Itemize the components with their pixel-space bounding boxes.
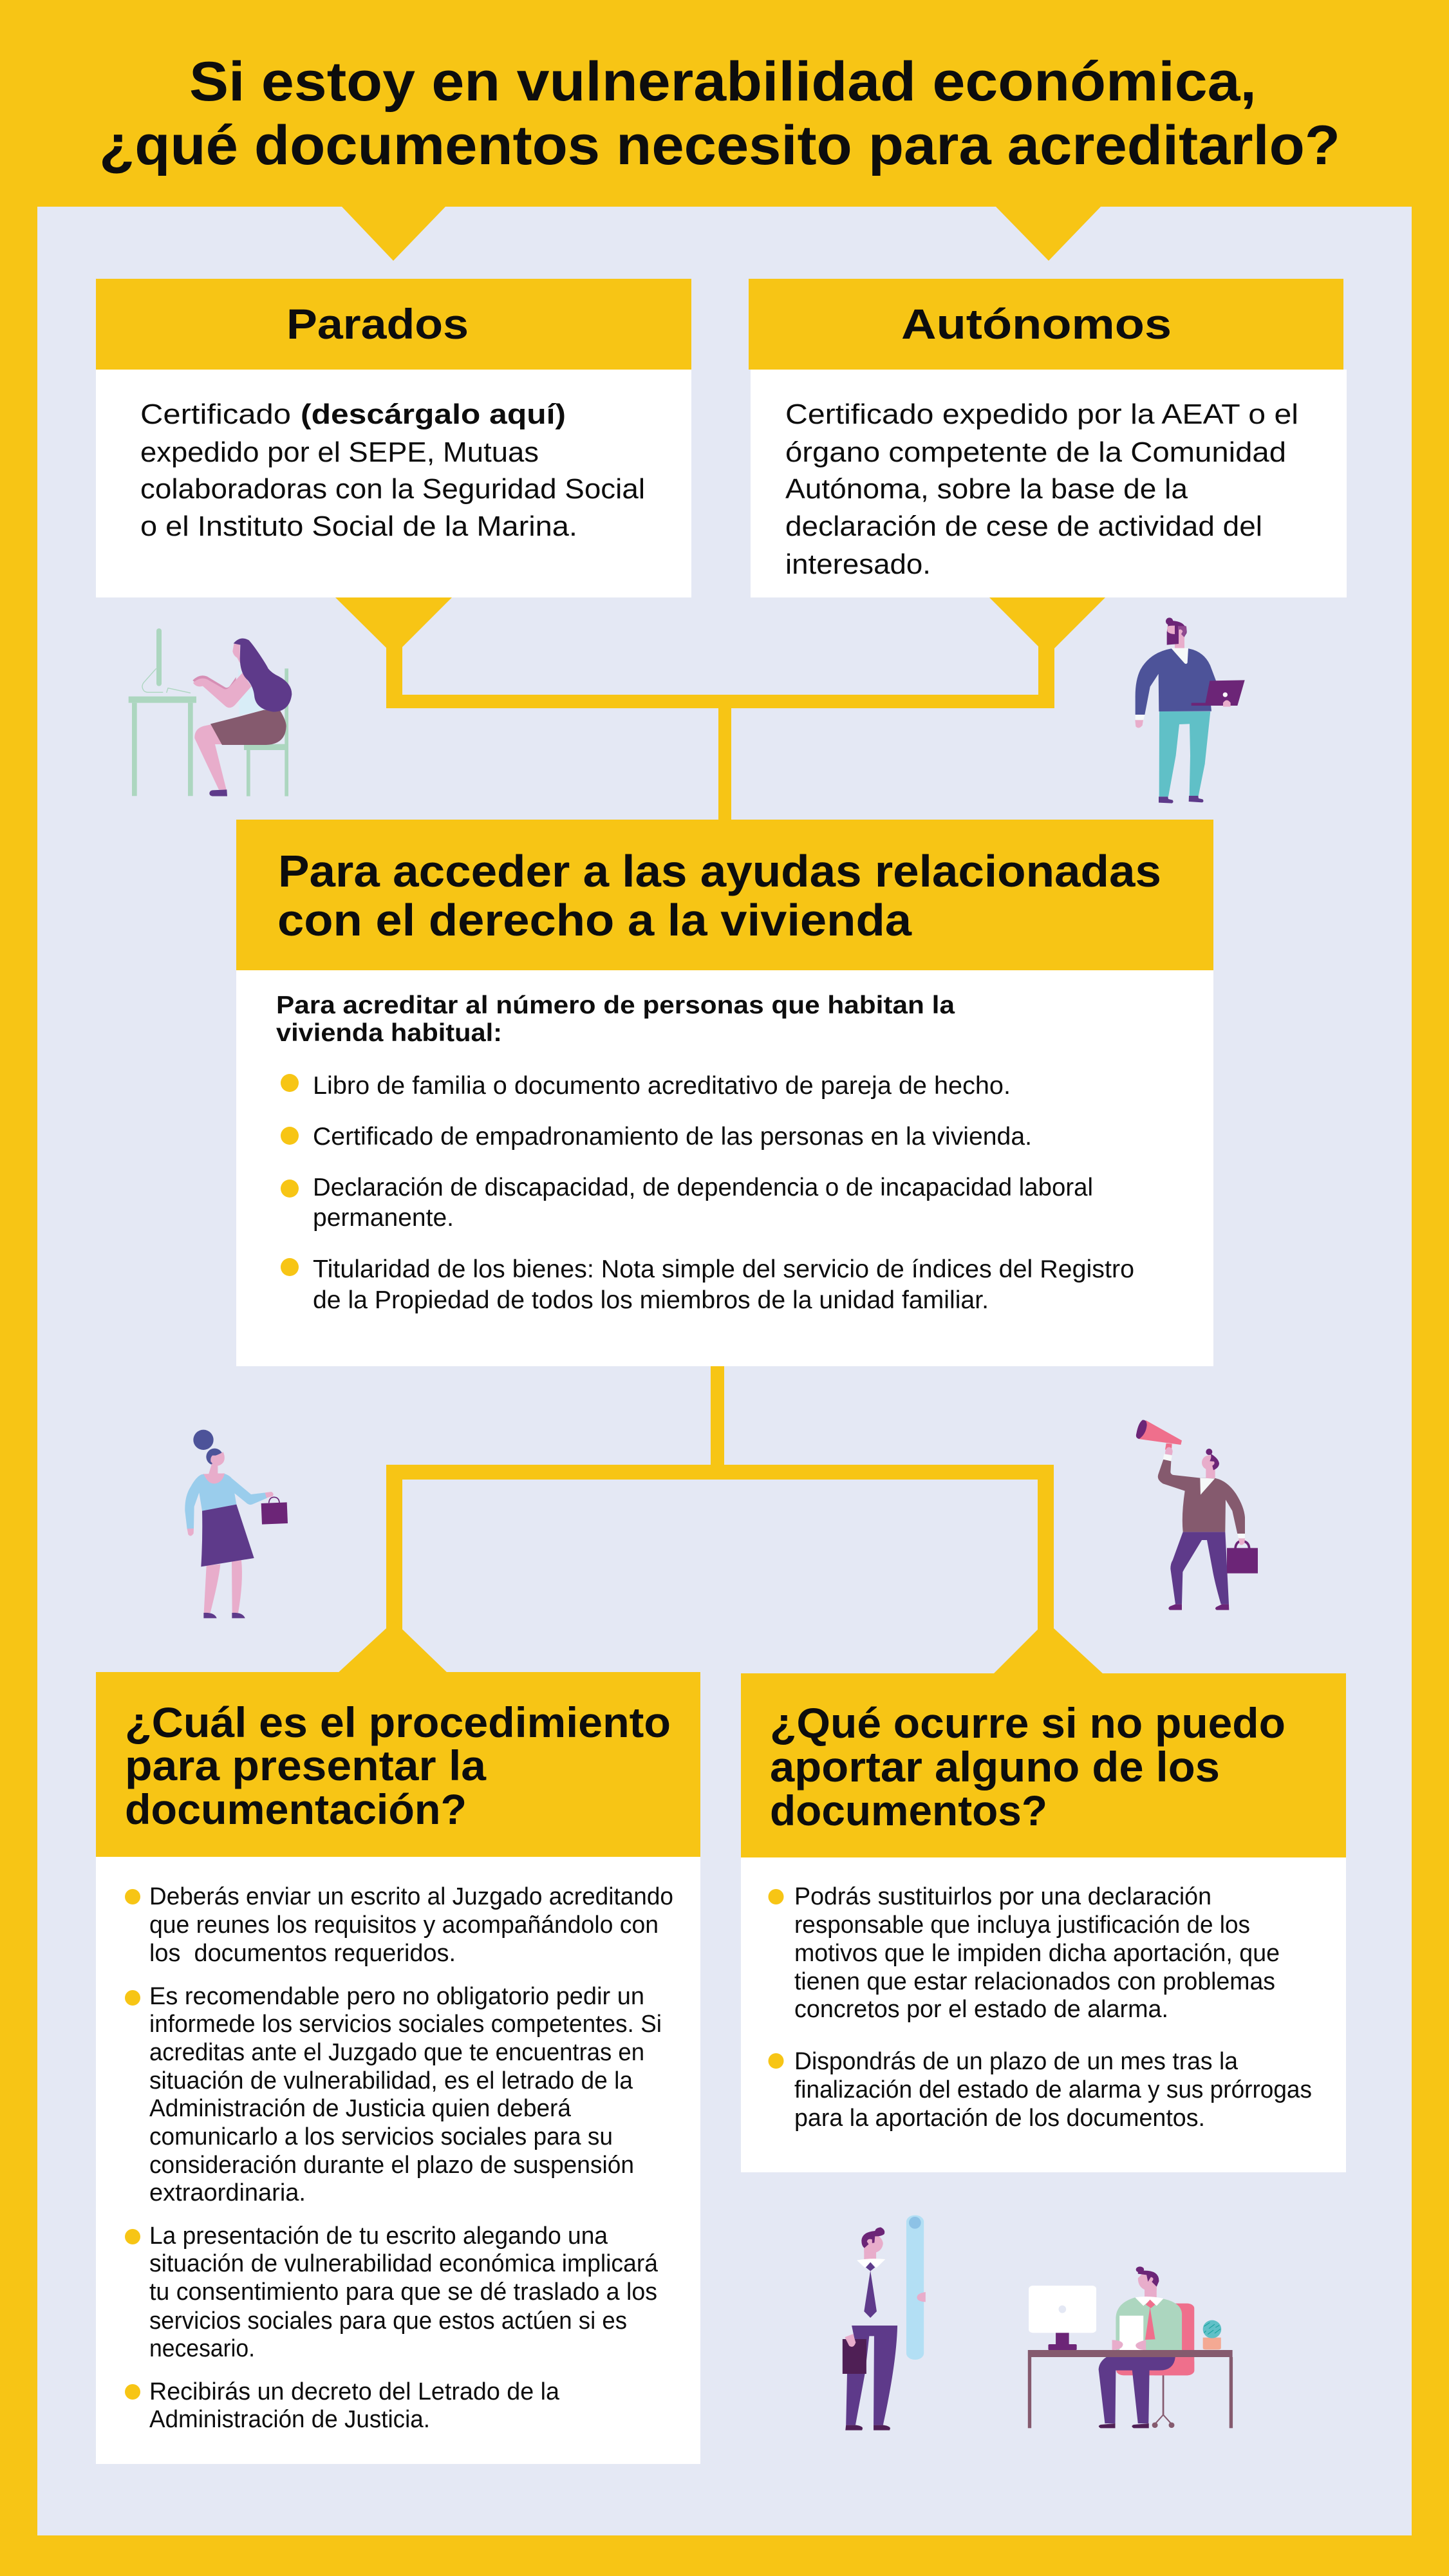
icon: man with megaphone and briefcase xyxy=(1136,1420,1258,1610)
Autónomos body text: declaración de cese de actividad del xyxy=(785,511,1262,542)
icon: woman with handbag xyxy=(185,1430,288,1618)
panel: Parados xyxy=(96,279,691,597)
procedure bullet list: La presentación de tu escrito alegando una xyxy=(149,2223,608,2250)
missing documents heading: ¿Qué ocurre si no puedo xyxy=(770,1699,1285,1747)
procedure bullet list: necesario. xyxy=(149,2335,255,2362)
procedure bullet list: Deberás enviar un escrito al Juzgado acreditando xyxy=(149,1883,673,1910)
missing documents heading: aportar alguno de los xyxy=(770,1743,1220,1791)
procedure bullet list: que reunes los requisitos y acompañándolo con xyxy=(149,1912,659,1939)
procedure bullet list xyxy=(125,1883,673,2433)
icon: man working at desk with computer and cactus xyxy=(1028,2266,1233,2428)
missing documents bullet list: Podrás sustituirlos por una declaración xyxy=(794,1883,1211,1910)
procedure bullet list: Es recomendable pero no obligatorio pedir un xyxy=(149,1983,644,2010)
housing heading: con el derecho a la vivienda xyxy=(277,895,912,945)
housing subheading: vivienda habitual: xyxy=(276,1019,502,1047)
panel: procedure xyxy=(96,1672,700,2464)
missing documents bullet list: Dispondrás de un plazo de un mes tras la xyxy=(794,2048,1239,2075)
Parados body text: o el Instituto Social de la Marina. xyxy=(140,511,577,542)
icon: woman at desk with computer xyxy=(129,628,292,796)
procedure bullet list: servicios sociales para que estos actúen si es xyxy=(149,2308,627,2335)
procedure bullet list: Administración de Justicia quien deberá xyxy=(149,2095,572,2122)
missing documents bullet list: finalización del estado de alarma y sus prórrogas xyxy=(794,2076,1312,2103)
missing documents bullet list: responsable que incluya justificación de los xyxy=(794,1912,1250,1939)
procedure bullet list: extraordinaria. xyxy=(149,2179,306,2206)
missing documents heading: documentos? xyxy=(770,1787,1047,1834)
housing bullet list: Titularidad de los bienes: Nota simple del servicio de índices del Registro xyxy=(313,1255,1134,1283)
panel: housing aid requirements xyxy=(236,820,1213,1366)
Parados header bar xyxy=(96,279,691,370)
housing subheading xyxy=(276,992,955,1047)
procedure bullet list: situación de vulnerabilidad económica implicará xyxy=(149,2250,659,2277)
arrow: title to Parados xyxy=(342,207,445,261)
housing header bar xyxy=(236,820,1213,970)
title: ¿qué documentos necesito para acreditarlo? xyxy=(99,115,1340,176)
panel: missing documents xyxy=(741,1673,1346,2172)
procedure bullet list: consideración durante el plazo de suspensión xyxy=(149,2152,634,2179)
title xyxy=(99,51,1340,176)
procedure bullet list: Recibirás un decreto del Letrado de la xyxy=(149,2378,560,2405)
housing subheading: Para acreditar al número de personas que habitan la xyxy=(276,992,955,1019)
missing documents bullet list: motivos que le impiden dicha aportación, que xyxy=(794,1940,1280,1967)
Parados body text xyxy=(140,399,645,542)
Autónomos body text: Certificado expedido por la AEAT o el xyxy=(785,399,1298,430)
housing bullet list: Certificado de empadronamiento de las personas en la vivienda. xyxy=(313,1123,1032,1151)
Autónomos header bar xyxy=(749,279,1343,370)
panel: Autónomos xyxy=(749,279,1347,597)
Autónomos body text xyxy=(785,399,1298,580)
housing heading: Para acceder a las ayudas relacionadas xyxy=(278,846,1161,896)
arrow: title to Autónomos xyxy=(996,207,1101,261)
procedure bullet list: los documentos requeridos. xyxy=(149,1940,456,1967)
procedure bullet list: informede los servicios sociales competentes. Si xyxy=(149,2011,662,2038)
connector: lower tree from housing box to two panels xyxy=(337,1366,1103,1674)
housing heading xyxy=(277,846,1161,945)
procedure bullet list: situación de vulnerabilidad, es el letrado de la xyxy=(149,2067,633,2094)
Autónomos body text: órgano competente de la Comunidad xyxy=(785,437,1286,468)
icon: man in tie holding door tube and clipboard xyxy=(843,2215,926,2430)
Parados heading: Parados xyxy=(286,300,469,348)
housing bullet list: Declaración de discapacidad, de dependencia o de incapacidad laboral xyxy=(313,1174,1093,1201)
housing bullet list: de la Propiedad de todos los miembros de la unidad familiar. xyxy=(313,1286,989,1314)
missing documents bullet list xyxy=(769,1883,1312,2132)
procedure heading: documentación? xyxy=(125,1785,467,1833)
missing documents bullet list: para la aportación de los documentos. xyxy=(794,2105,1205,2132)
procedure bullet list: tu consentimiento para que se dé traslado a los xyxy=(149,2279,657,2306)
procedure bullet list: Administración de Justicia. xyxy=(149,2406,430,2433)
procedure heading: ¿Cuál es el procedimiento xyxy=(125,1698,671,1746)
missing documents bullet list: concretos por el estado de alarma. xyxy=(794,1996,1168,2023)
Autónomos body text: interesado. xyxy=(785,549,931,580)
Parados body text: colaboradoras con la Seguridad Social xyxy=(140,473,645,505)
procedure header bar xyxy=(96,1672,700,1857)
connector: upper tree joining both panels to housing box xyxy=(335,597,1105,821)
missing documents heading xyxy=(770,1699,1285,1834)
procedure bullet list: comunicarlo a los servicios sociales para su xyxy=(149,2123,613,2150)
housing bullet list: Libro de familia o documento acreditativo de pareja de hecho. xyxy=(313,1072,1011,1100)
Autónomos body text: Autónoma, sobre la base de la xyxy=(785,473,1188,505)
procedure heading xyxy=(125,1698,671,1833)
housing bullet list xyxy=(281,1072,1134,1314)
title: Si estoy en vulnerabilidad económica, xyxy=(189,51,1257,113)
Autónomos heading: Autónomos xyxy=(901,300,1172,348)
missing documents header bar xyxy=(741,1673,1346,1857)
housing bullet list: permanente. xyxy=(313,1204,454,1232)
procedure heading: para presentar la xyxy=(125,1742,487,1789)
Parados body text: expedido por el SEPE, Mutuas xyxy=(140,437,539,468)
missing documents bullet list: tienen que estar relacionados con problemas xyxy=(794,1968,1275,1995)
procedure bullet list: acreditas ante el Juzgado que te encuentras en xyxy=(149,2039,644,2066)
Parados body text: (descárgalo aquí) xyxy=(301,399,566,430)
Parados body text: Certificado xyxy=(140,399,291,430)
icon: bearded man with laptop xyxy=(1135,617,1245,804)
